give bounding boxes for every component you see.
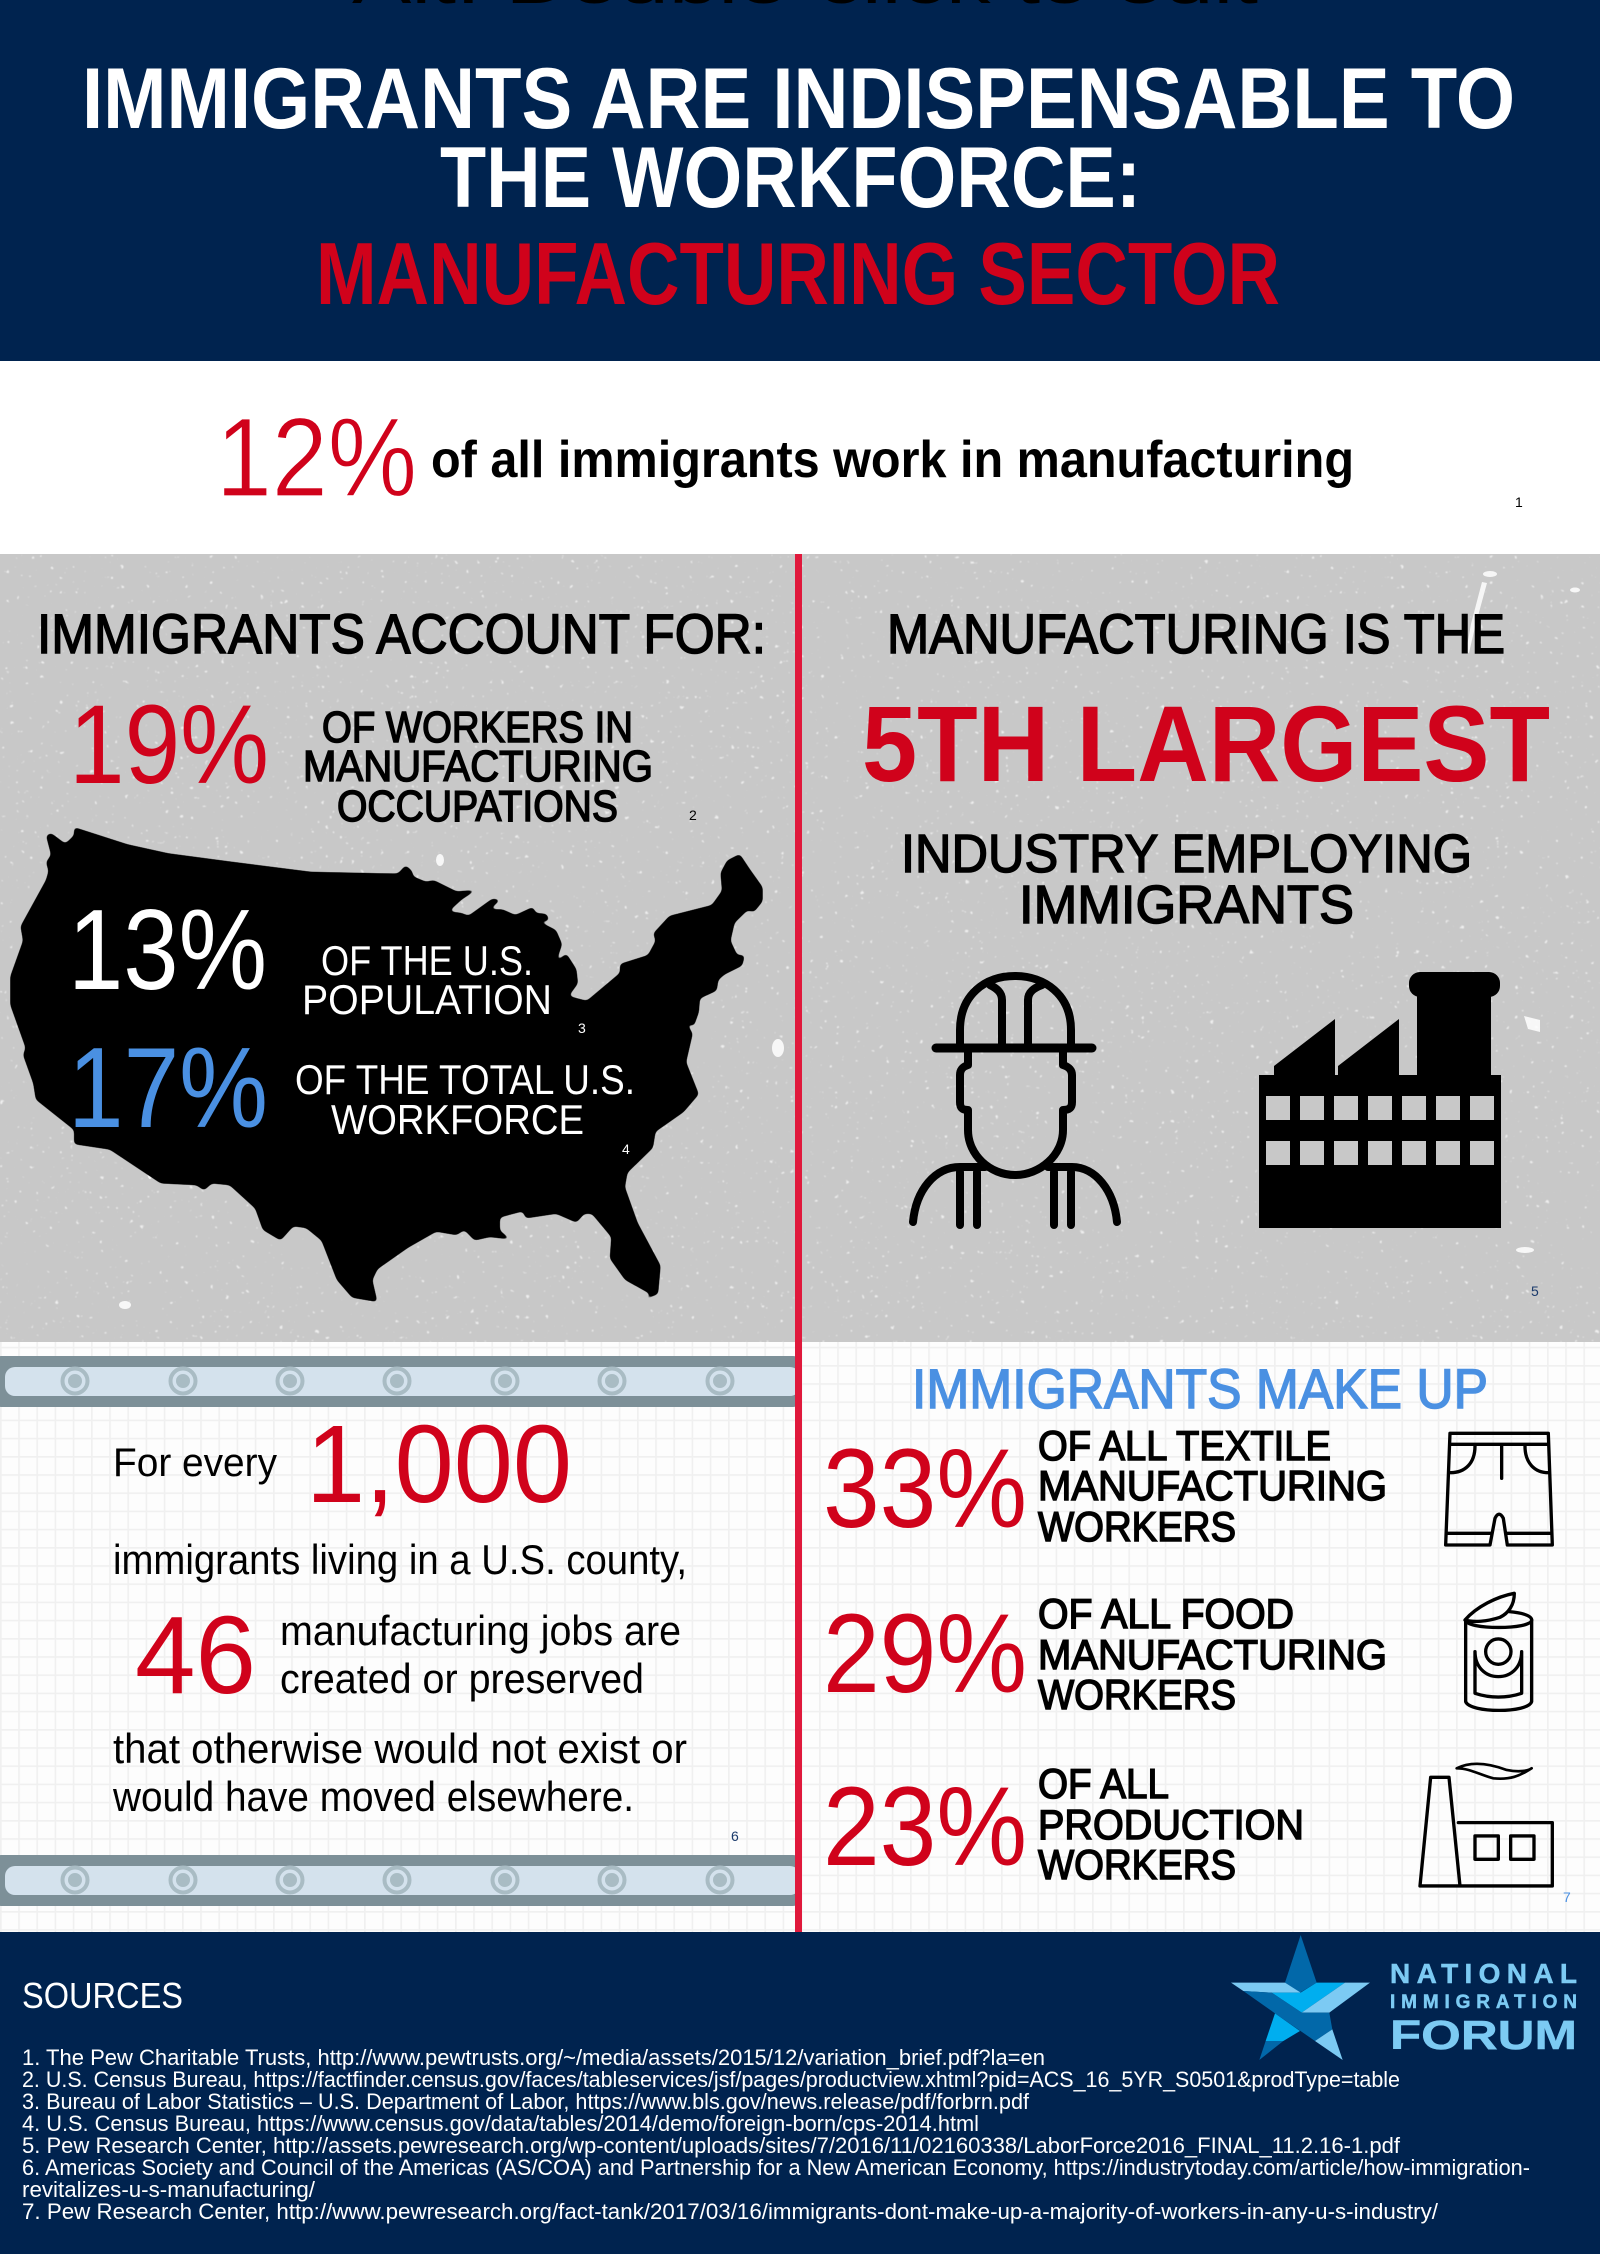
icon: star bbox=[1231, 1935, 1370, 2060]
sources list: 2. U.S. Census Bureau, https://factfinder.census.gov/faces/tableservices/jsf/pages/productview.xhtml?pid=ACS_16_5YR_S0501&prodType=table bbox=[22, 2067, 1400, 2092]
text: for every 1,000: 1,000 bbox=[306, 1403, 572, 1526]
stat label: workers in manufacturing bbox=[303, 703, 653, 831]
panel: immigrants account for: 2 bbox=[689, 807, 697, 823]
stat: 23% production: OF ALL bbox=[1038, 1760, 1169, 1807]
wordmark: IMMIGRATION bbox=[1390, 1992, 1577, 2013]
stat: 33% textile bbox=[823, 1422, 1387, 1551]
stat label: population: OF THE U.S. bbox=[321, 937, 533, 984]
wordmark bbox=[1390, 1958, 1577, 2058]
stat label bbox=[901, 824, 1472, 935]
stat label: population bbox=[302, 937, 552, 1023]
stat: 23% production: PRODUCTION bbox=[1038, 1801, 1304, 1848]
stat: 23% production: 23% bbox=[823, 1764, 1027, 1889]
stat: 33% textile: WORKERS bbox=[1038, 1503, 1236, 1550]
text: closing sentence bbox=[112, 1725, 687, 1820]
stat: 23% production bbox=[823, 1760, 1304, 1889]
wordmark: NATIONAL bbox=[1390, 1958, 1577, 1989]
stat label: workers in manufacturing: MANUFACTURING bbox=[303, 742, 653, 791]
stat label: workforce: OF THE TOTAL U.S. bbox=[295, 1056, 635, 1103]
heading: IMMIGRANTS MAKE UP bbox=[912, 1357, 1488, 1420]
text: 46 jobs bbox=[135, 1594, 681, 1717]
conveyor belt: top bbox=[0, 1356, 800, 1407]
stat label: workers in manufacturing: OCCUPATIONS bbox=[337, 782, 618, 831]
stat label: workers in manufacturing: OF WORKERS IN bbox=[322, 703, 633, 752]
sources list: 1. The Pew Charitable Trusts, http://www.pewtrusts.org/~/media/assets/2015/12/variation_brief.pdf?la=en bbox=[22, 2045, 1045, 2070]
text: for every 1,000: For every bbox=[113, 1441, 277, 1485]
panel: immigrants account for bbox=[10, 602, 766, 1308]
heading: MANUFACTURING IS THE bbox=[887, 602, 1505, 665]
stat label: workforce: WORKFORCE bbox=[331, 1096, 584, 1143]
stat: 29% food: MANUFACTURING bbox=[1038, 1631, 1387, 1678]
sources list: 5. Pew Research Center, http://assets.pewresearch.org/wp-content/uploads/sites/7/2016/11/02160338/LaborForce2016_FINAL_11.2.16-1.pdf bbox=[22, 2133, 1401, 2158]
panel: fifth largest bbox=[862, 602, 1550, 1299]
icon: shorts bbox=[1446, 1433, 1552, 1545]
title bbox=[82, 51, 1515, 226]
panel: every 1,000 immigrants bbox=[0, 1356, 800, 1906]
icon: worker with hard hat bbox=[913, 976, 1117, 1225]
sources list: 3. Bureau of Labor Statistics – U.S. Department of Labor, https://www.bls.gov/news.release/pdf/forbrn.pdf bbox=[22, 2089, 1030, 2114]
panel: fifth largest: 5 bbox=[1531, 1283, 1539, 1299]
text: closing sentence: that otherwise would not exist or bbox=[113, 1725, 687, 1772]
text: 46 jobs: 46 bbox=[135, 1594, 256, 1717]
panel: immigrants make up bbox=[823, 1357, 1571, 1905]
stat label: INDUSTRY EMPLOYING bbox=[901, 824, 1472, 884]
panel: every 1,000 immigrants: 6 bbox=[731, 1828, 739, 1844]
panel: immigrants account for: 3 bbox=[578, 1020, 586, 1036]
sources list: 4. U.S. Census Bureau, https://www.census.gov/data/tables/2014/demo/foreign-born/cps-2014.html bbox=[22, 2111, 979, 2136]
big stat: 5TH LARGEST bbox=[862, 683, 1550, 804]
stat band: 12%: of all immigrants work in manufacturing bbox=[431, 431, 1354, 489]
stat: 23% production: WORKERS bbox=[1038, 1841, 1236, 1888]
stat band: 12%: 12% bbox=[216, 395, 417, 520]
panel: grid background bbox=[0, 1342, 1600, 1932]
header banner bbox=[0, 0, 1600, 361]
divider: vertical red rule bbox=[795, 554, 802, 1932]
wordmark: FORUM bbox=[1390, 2012, 1577, 2058]
icon: food can bbox=[1465, 1593, 1532, 1710]
heading: IMMIGRANTS ACCOUNT FOR: bbox=[37, 602, 766, 665]
panel: immigrants make up: 7 bbox=[1563, 1889, 1571, 1905]
stat: 33% textile: OF ALL TEXTILE bbox=[1038, 1422, 1331, 1469]
stat label: population: POPULATION bbox=[302, 976, 552, 1023]
text: 46 jobs: created or preserved bbox=[280, 1655, 644, 1702]
stat: 29% food: OF ALL FOOD bbox=[1038, 1590, 1294, 1637]
map of the United States bbox=[10, 826, 763, 1308]
text: closing sentence: would have moved elsewhere. bbox=[112, 1773, 634, 1820]
stat: 29% food: 29% bbox=[823, 1591, 1027, 1716]
sources heading: SOURCES bbox=[22, 1975, 183, 2016]
logo: National Immigration Forum bbox=[1231, 1935, 1577, 2060]
stat label: workforce bbox=[295, 1056, 635, 1143]
stat: 29% food bbox=[823, 1590, 1387, 1718]
title: THE WORKFORCE: bbox=[440, 130, 1141, 226]
panel: speckled background bbox=[0, 554, 1600, 1342]
sources list: 7. Pew Research Center, http://www.pewresearch.org/fact-tank/2017/03/16/immigrants-dont-make-up-a-majority-of-workers-in-any-u-s-industry/ bbox=[22, 2199, 1439, 2224]
conveyor belt: bottom bbox=[0, 1855, 800, 1906]
text: for every 1,000: immigrants living in a U.S. county, bbox=[113, 1536, 687, 1583]
stat band: 12%: 1 bbox=[1515, 494, 1523, 510]
sources list: revitalizes-u-s-manufacturing/ bbox=[22, 2177, 316, 2202]
stat: 19%: 19% bbox=[69, 682, 269, 807]
stat: 33% textile: 33% bbox=[823, 1426, 1027, 1551]
sources list: 6. Americas Society and Council of the Americas (AS/COA) and Partnership for a New American Economy, https://industrytoday.com/article/how-immigration- bbox=[22, 2155, 1530, 2180]
stat: 17%: 17% bbox=[68, 1025, 268, 1152]
text: for every 1,000 bbox=[113, 1403, 687, 1583]
sources list bbox=[22, 2045, 1530, 2224]
stat: 33% textile: MANUFACTURING bbox=[1038, 1462, 1387, 1509]
stat: 29% food: WORKERS bbox=[1038, 1671, 1236, 1718]
icon: factory silhouette bbox=[1259, 972, 1501, 1228]
footer panel bbox=[0, 1932, 1600, 2254]
stat band: 12% bbox=[0, 361, 1600, 554]
stat: 13%: 13% bbox=[68, 887, 267, 1014]
icon: small factory bbox=[1420, 1764, 1552, 1886]
subtitle: MANUFACTURING SECTOR bbox=[316, 224, 1280, 323]
text: 46 jobs: manufacturing jobs are bbox=[280, 1607, 681, 1654]
panel: immigrants account for: 4 bbox=[622, 1141, 630, 1157]
stat label: IMMIGRANTS bbox=[1019, 875, 1354, 935]
